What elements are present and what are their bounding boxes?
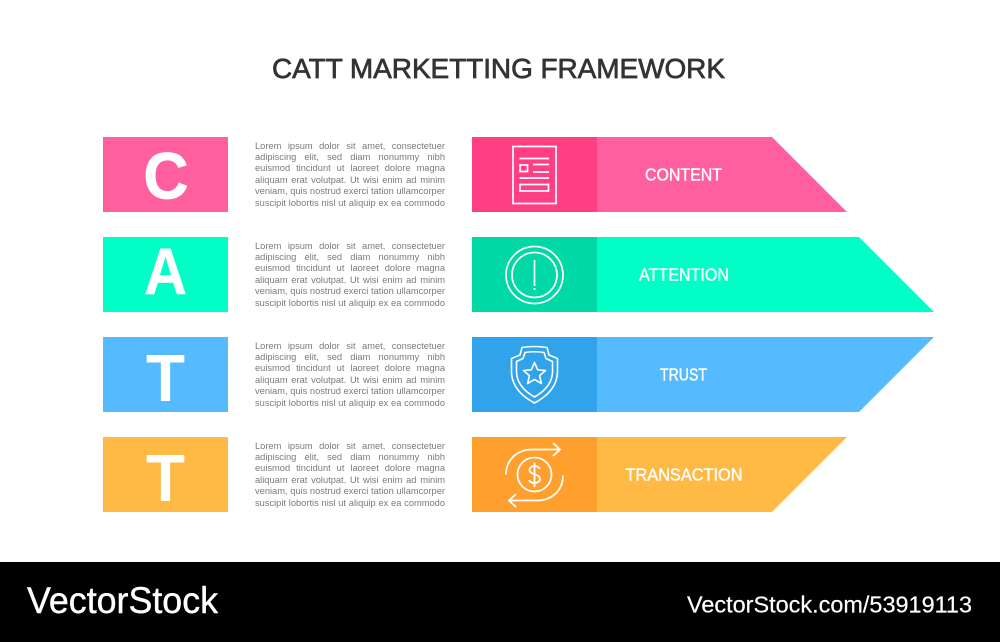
text block: attention: euismod tincidunt ut laoreet dolore magna <box>255 263 445 273</box>
watermark url: VectorStock.com/53919113 <box>687 592 972 618</box>
icon: document <box>513 146 556 204</box>
label: transaction: TRANSACTION <box>626 464 742 484</box>
letter block: T (transaction) <box>103 437 228 512</box>
watermark logo: VectorStock <box>27 580 218 621</box>
text block: content: Lorem ipsum dolor sit amet, consectetuer <box>255 140 445 150</box>
text block: trust: suscipit lobortis nisl ut aliquip ex ea commodo <box>255 398 445 408</box>
text block: attention: Lorem ipsum dolor sit amet, consectetuer <box>255 240 445 250</box>
footer bar <box>0 562 1000 642</box>
text block: content <box>255 140 446 208</box>
icon: shield with star <box>512 346 558 403</box>
arrow bar: transaction <box>472 437 847 512</box>
text block: transaction: suscipit lobortis nisl ut aliquip ex ea commodo <box>255 498 445 508</box>
icon: money exchange arrows <box>506 443 563 507</box>
text block: content: aliquam erat volutpat. Ut wisi enim ad minim <box>255 175 445 185</box>
text block: content: suscipit lobortis nisl ut aliquip ex ea commodo <box>255 198 445 208</box>
letter T: T <box>146 341 185 416</box>
letter block: C <box>103 137 228 212</box>
label: content: CONTENT <box>645 164 722 184</box>
text block: transaction: veniam, quis nostrud exerci tation ullamcorper <box>255 486 445 496</box>
text block: trust: Lorem ipsum dolor sit amet, consectetuer <box>255 340 445 350</box>
icon: exclamation circle <box>506 246 563 304</box>
text block: content: adipiscing elit, sed diam nonummy nibh <box>255 152 445 162</box>
text block: transaction: euismod tincidunt ut laoreet dolore magna <box>255 463 445 473</box>
text block: attention: veniam, quis nostrud exerci tation ullamcorper <box>255 286 445 296</box>
letter A: A <box>144 234 187 308</box>
text block: content: euismod tincidunt ut laoreet dolore magna <box>255 163 445 173</box>
arrow bar: trust <box>472 337 934 412</box>
text block: trust: adipiscing elit, sed diam nonummy nibh <box>255 352 445 362</box>
text block: transaction: aliquam erat volutpat. Ut wisi enim ad minim <box>255 475 445 485</box>
arrow bar: attention <box>472 237 934 312</box>
arrow bar: content <box>472 137 847 212</box>
label: attention: ATTENTION <box>639 264 729 284</box>
text block: trust <box>255 340 446 408</box>
title: CATT MARKETTING FRAMEWORK <box>272 53 725 84</box>
letter block: T (trust) <box>103 337 228 412</box>
text block: attention: adipiscing elit, sed diam nonummy nibh <box>255 252 445 262</box>
text block: trust: euismod tincidunt ut laoreet dolore magna <box>255 363 445 373</box>
label: trust: TRUST <box>660 364 707 384</box>
text block: content: veniam, quis nostrud exerci tation ullamcorper <box>255 186 445 196</box>
text block: attention <box>255 240 446 308</box>
text block: trust: veniam, quis nostrud exerci tation ullamcorper <box>255 386 445 396</box>
text block: transaction: Lorem ipsum dolor sit amet, consectetuer <box>255 440 445 450</box>
letter T: T <box>146 441 185 516</box>
letter C: C <box>144 138 188 212</box>
text block: attention: aliquam erat volutpat. Ut wisi enim ad minim <box>255 275 445 285</box>
text block: transaction: adipiscing elit, sed diam nonummy nibh <box>255 452 445 462</box>
text block: transaction <box>255 440 446 508</box>
text block: attention: suscipit lobortis nisl ut aliquip ex ea commodo <box>255 298 445 308</box>
text block: trust: aliquam erat volutpat. Ut wisi enim ad minim <box>255 375 445 385</box>
letter block: A <box>103 237 228 312</box>
